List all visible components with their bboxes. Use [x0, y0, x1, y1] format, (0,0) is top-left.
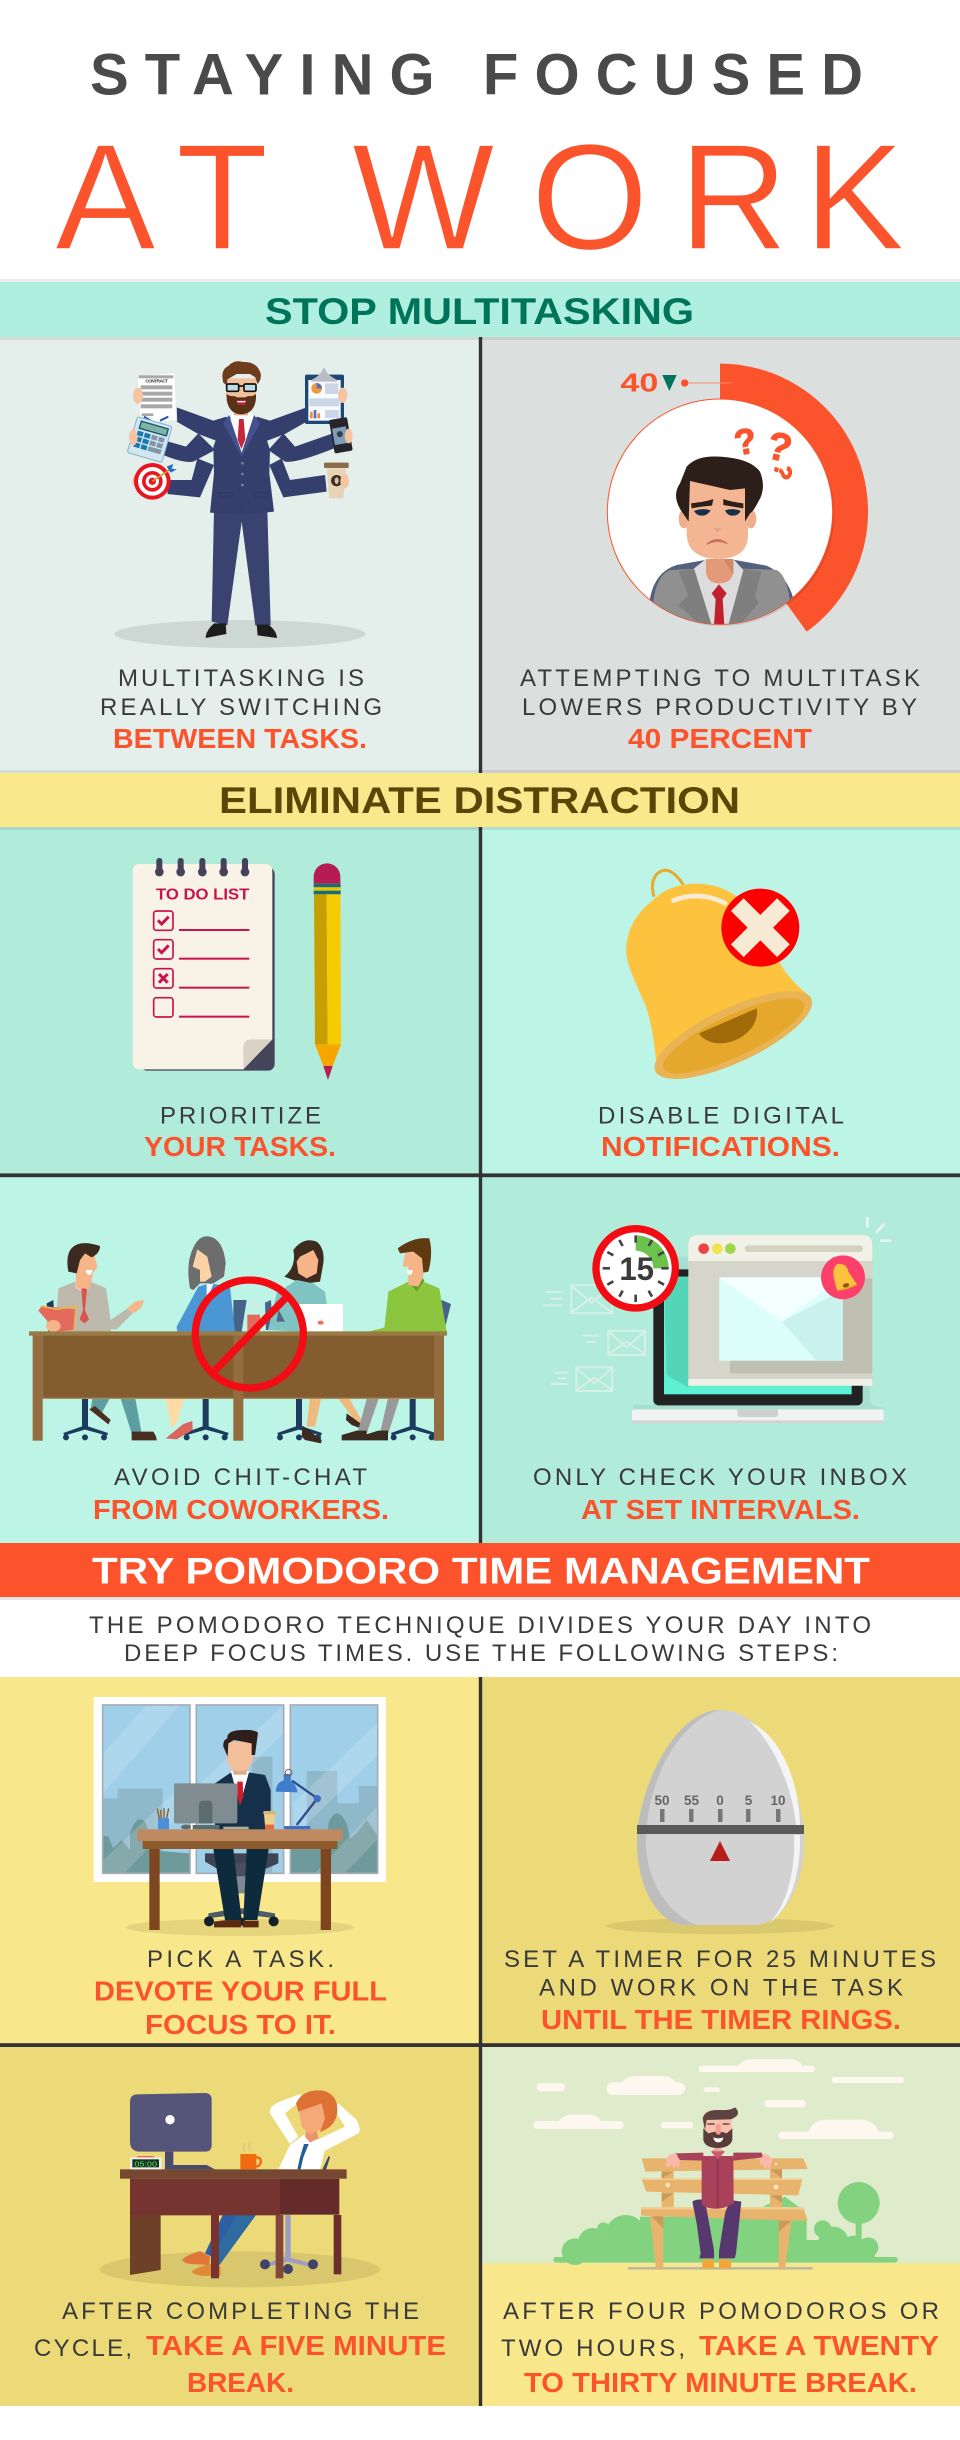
- sparks: [867, 1218, 890, 1241]
- prohibition sign: [195, 1280, 303, 1388]
- illustration: pencil: [314, 863, 341, 1080]
- panel: pomodoro introduction: [0, 1597, 960, 1677]
- coffee mug: [247, 1315, 260, 1332]
- illustration: egg kitchen timer: 0: [716, 1793, 724, 1808]
- caption: TAKE A FIVE MINUTE: [146, 2330, 446, 2361]
- panel: pomodoro introduction: THE POMODORO TECHNIQUE DIVIDES YOUR DAY INTO: [89, 1612, 871, 1639]
- illustration: egg kitchen timer: [606, 1710, 834, 1934]
- panel: set a timer: [480, 1677, 960, 2044]
- caption: [520, 665, 920, 754]
- coffee: [264, 1814, 275, 1829]
- lamp: [276, 1769, 321, 1829]
- caption: AND WORK ON THE TASK: [539, 1974, 903, 2002]
- caption: BREAK.: [187, 2367, 294, 2398]
- 40 gauge label: 40: [620, 368, 658, 398]
- caption: LOWERS PRODUCTIVITY BY: [522, 694, 917, 721]
- illustration: man relaxing at desk: [100, 2090, 380, 2287]
- illustration: egg kitchen timer: 5: [745, 1793, 753, 1808]
- caption: AVOID CHIT-CHAT: [114, 1464, 367, 1491]
- illustration: egg kitchen timer: 10: [770, 1793, 786, 1808]
- browser window: [688, 1235, 872, 1386]
- caption: ATTEMPTING TO MULTITASK: [520, 665, 920, 692]
- heading band: eliminate distraction: ELIMINATE DISTRACTION: [219, 780, 740, 821]
- illustration: coworkers at table with prohibition sign: [29, 1236, 451, 1443]
- panel: check inbox at intervals: [480, 1175, 960, 1543]
- pencil cup: [158, 1818, 169, 1829]
- notification bell: [821, 1255, 865, 1299]
- heading band: try pomodoro time management: [0, 1543, 960, 1600]
- chairs: [47, 1300, 451, 1440]
- caption: YOUR TASKS.: [144, 1131, 336, 1162]
- caption: PICK A TASK.: [147, 1946, 334, 1973]
- heading band: eliminate distraction: [0, 770, 960, 830]
- caption: TO THIRTY MINUTE BREAK.: [524, 2367, 917, 2398]
- caption: [94, 1946, 387, 2040]
- panel: pomodoro introduction: DEEP FOCUS TIMES. USE THE FOLLOWING STEPS:: [124, 1640, 838, 1667]
- caption: MULTITASKING IS: [118, 665, 364, 692]
- chair: [285, 2215, 291, 2258]
- gauge arc: [720, 364, 868, 632]
- timer clock: [592, 1225, 679, 1312]
- 40 gauge label: [620, 368, 732, 398]
- caption: AFTER FOUR POMODOROS OR: [503, 2298, 939, 2325]
- caption: [533, 1464, 907, 1525]
- timer clock: 15: [619, 1251, 654, 1287]
- caption: REALLY SWITCHING: [100, 694, 382, 721]
- caption: 40 PERCENT: [628, 723, 812, 754]
- digital clock: 05:00: [134, 2159, 157, 2168]
- title line: at work: AT WORK: [55, 112, 905, 281]
- caption: [100, 665, 382, 754]
- bench: [628, 2267, 813, 2270]
- illustration: to do list: [133, 858, 275, 1071]
- envelope: [719, 1277, 843, 1361]
- panel: productivity drops 40 percent: [480, 337, 960, 774]
- caption: BETWEEN TASKS.: [113, 723, 367, 754]
- person 4: [357, 1397, 400, 1433]
- monitor: [165, 2152, 215, 2169]
- illustration: to do list: TO DO LIST: [156, 886, 250, 903]
- panel: multitasking is switching: [0, 337, 480, 774]
- caption: [504, 1946, 936, 2035]
- desk: [130, 2179, 280, 2215]
- illustration: bell with red x: [626, 870, 823, 1096]
- heading band: try pomodoro time management: TRY POMODORO TIME MANAGEMENT: [92, 1550, 870, 1592]
- caption: TWO HOURS,: [501, 2335, 685, 2362]
- person 1: [91, 1397, 142, 1433]
- window: [94, 1697, 386, 1882]
- panel: pick a task: [0, 1677, 480, 2044]
- caption: DEVOTE YOUR FULL: [94, 1976, 387, 2006]
- caption: NOTIFICATIONS.: [601, 1131, 840, 1162]
- caption: AT SET INTERVALS.: [581, 1494, 860, 1525]
- question marks: ?: [767, 461, 797, 482]
- panel: take a five minute break: [0, 2044, 480, 2406]
- legs: [205, 2215, 240, 2257]
- panel: prioritize your tasks: [0, 827, 480, 1175]
- caption: [93, 1464, 389, 1525]
- illustration: man at desk by window: [94, 1697, 386, 1936]
- title: [55, 42, 905, 281]
- caption: [144, 1102, 336, 1162]
- chair: [205, 1853, 278, 1868]
- man: [215, 1773, 271, 1830]
- caption: ONLY CHECK YOUR INBOX: [533, 1464, 907, 1491]
- caption: [598, 1102, 844, 1162]
- caption: AFTER COMPLETING THE: [62, 2298, 419, 2325]
- heading band: stop multitasking: STOP MULTITASKING: [265, 291, 694, 332]
- panel: avoid chit-chat: [0, 1175, 480, 1543]
- caption: [34, 2298, 446, 2398]
- man: [692, 2199, 714, 2258]
- question marks: [731, 419, 797, 482]
- flying envelopes: [543, 1285, 645, 1391]
- illustration: man on park bench: [533, 2059, 904, 2270]
- caption: UNTIL THE TIMER RINGS.: [541, 2004, 901, 2035]
- person 3: [307, 1397, 365, 1427]
- panel: disable notifications: [480, 827, 960, 1175]
- illustration: man with six arms: [115, 361, 365, 648]
- caption: FROM COWORKERS.: [93, 1494, 389, 1525]
- illustration: dial and sad man: [607, 364, 868, 632]
- caption: TAKE A TWENTY: [699, 2330, 939, 2361]
- caption: DISABLE DIGITAL: [598, 1102, 844, 1130]
- clouds: [533, 2059, 904, 2139]
- person 2: [165, 1397, 185, 1428]
- sad man: [647, 456, 797, 632]
- caption: [501, 2298, 939, 2398]
- caption: FOCUS TO IT.: [145, 2009, 336, 2040]
- question marks: ?: [731, 419, 760, 464]
- caption: CYCLE,: [34, 2335, 132, 2362]
- question marks: ?: [762, 423, 796, 472]
- title line: staying focused: STAYING FOCUSED: [90, 42, 863, 108]
- heading band: stop multitasking: [0, 279, 960, 340]
- table: [43, 1335, 434, 1398]
- man torso and arms: [323, 2157, 329, 2170]
- desk: [137, 1829, 343, 1841]
- digital clock: [130, 2156, 162, 2169]
- illustration: egg kitchen timer: 55: [684, 1793, 699, 1808]
- illustration: man with six arms: CONTRACT: [145, 379, 168, 384]
- panel: take a long break: [480, 2044, 960, 2406]
- caption: PRIORITIZE: [160, 1102, 321, 1130]
- illustration: egg kitchen timer: 50: [654, 1793, 670, 1808]
- illustration: laptop email and timer: [543, 1218, 890, 1423]
- caption: SET A TIMER FOR 25 MINUTES: [504, 1946, 936, 1973]
- bushes and tree: [553, 2182, 898, 2265]
- mug: [253, 2157, 261, 2167]
- monitor: [174, 1783, 237, 1823]
